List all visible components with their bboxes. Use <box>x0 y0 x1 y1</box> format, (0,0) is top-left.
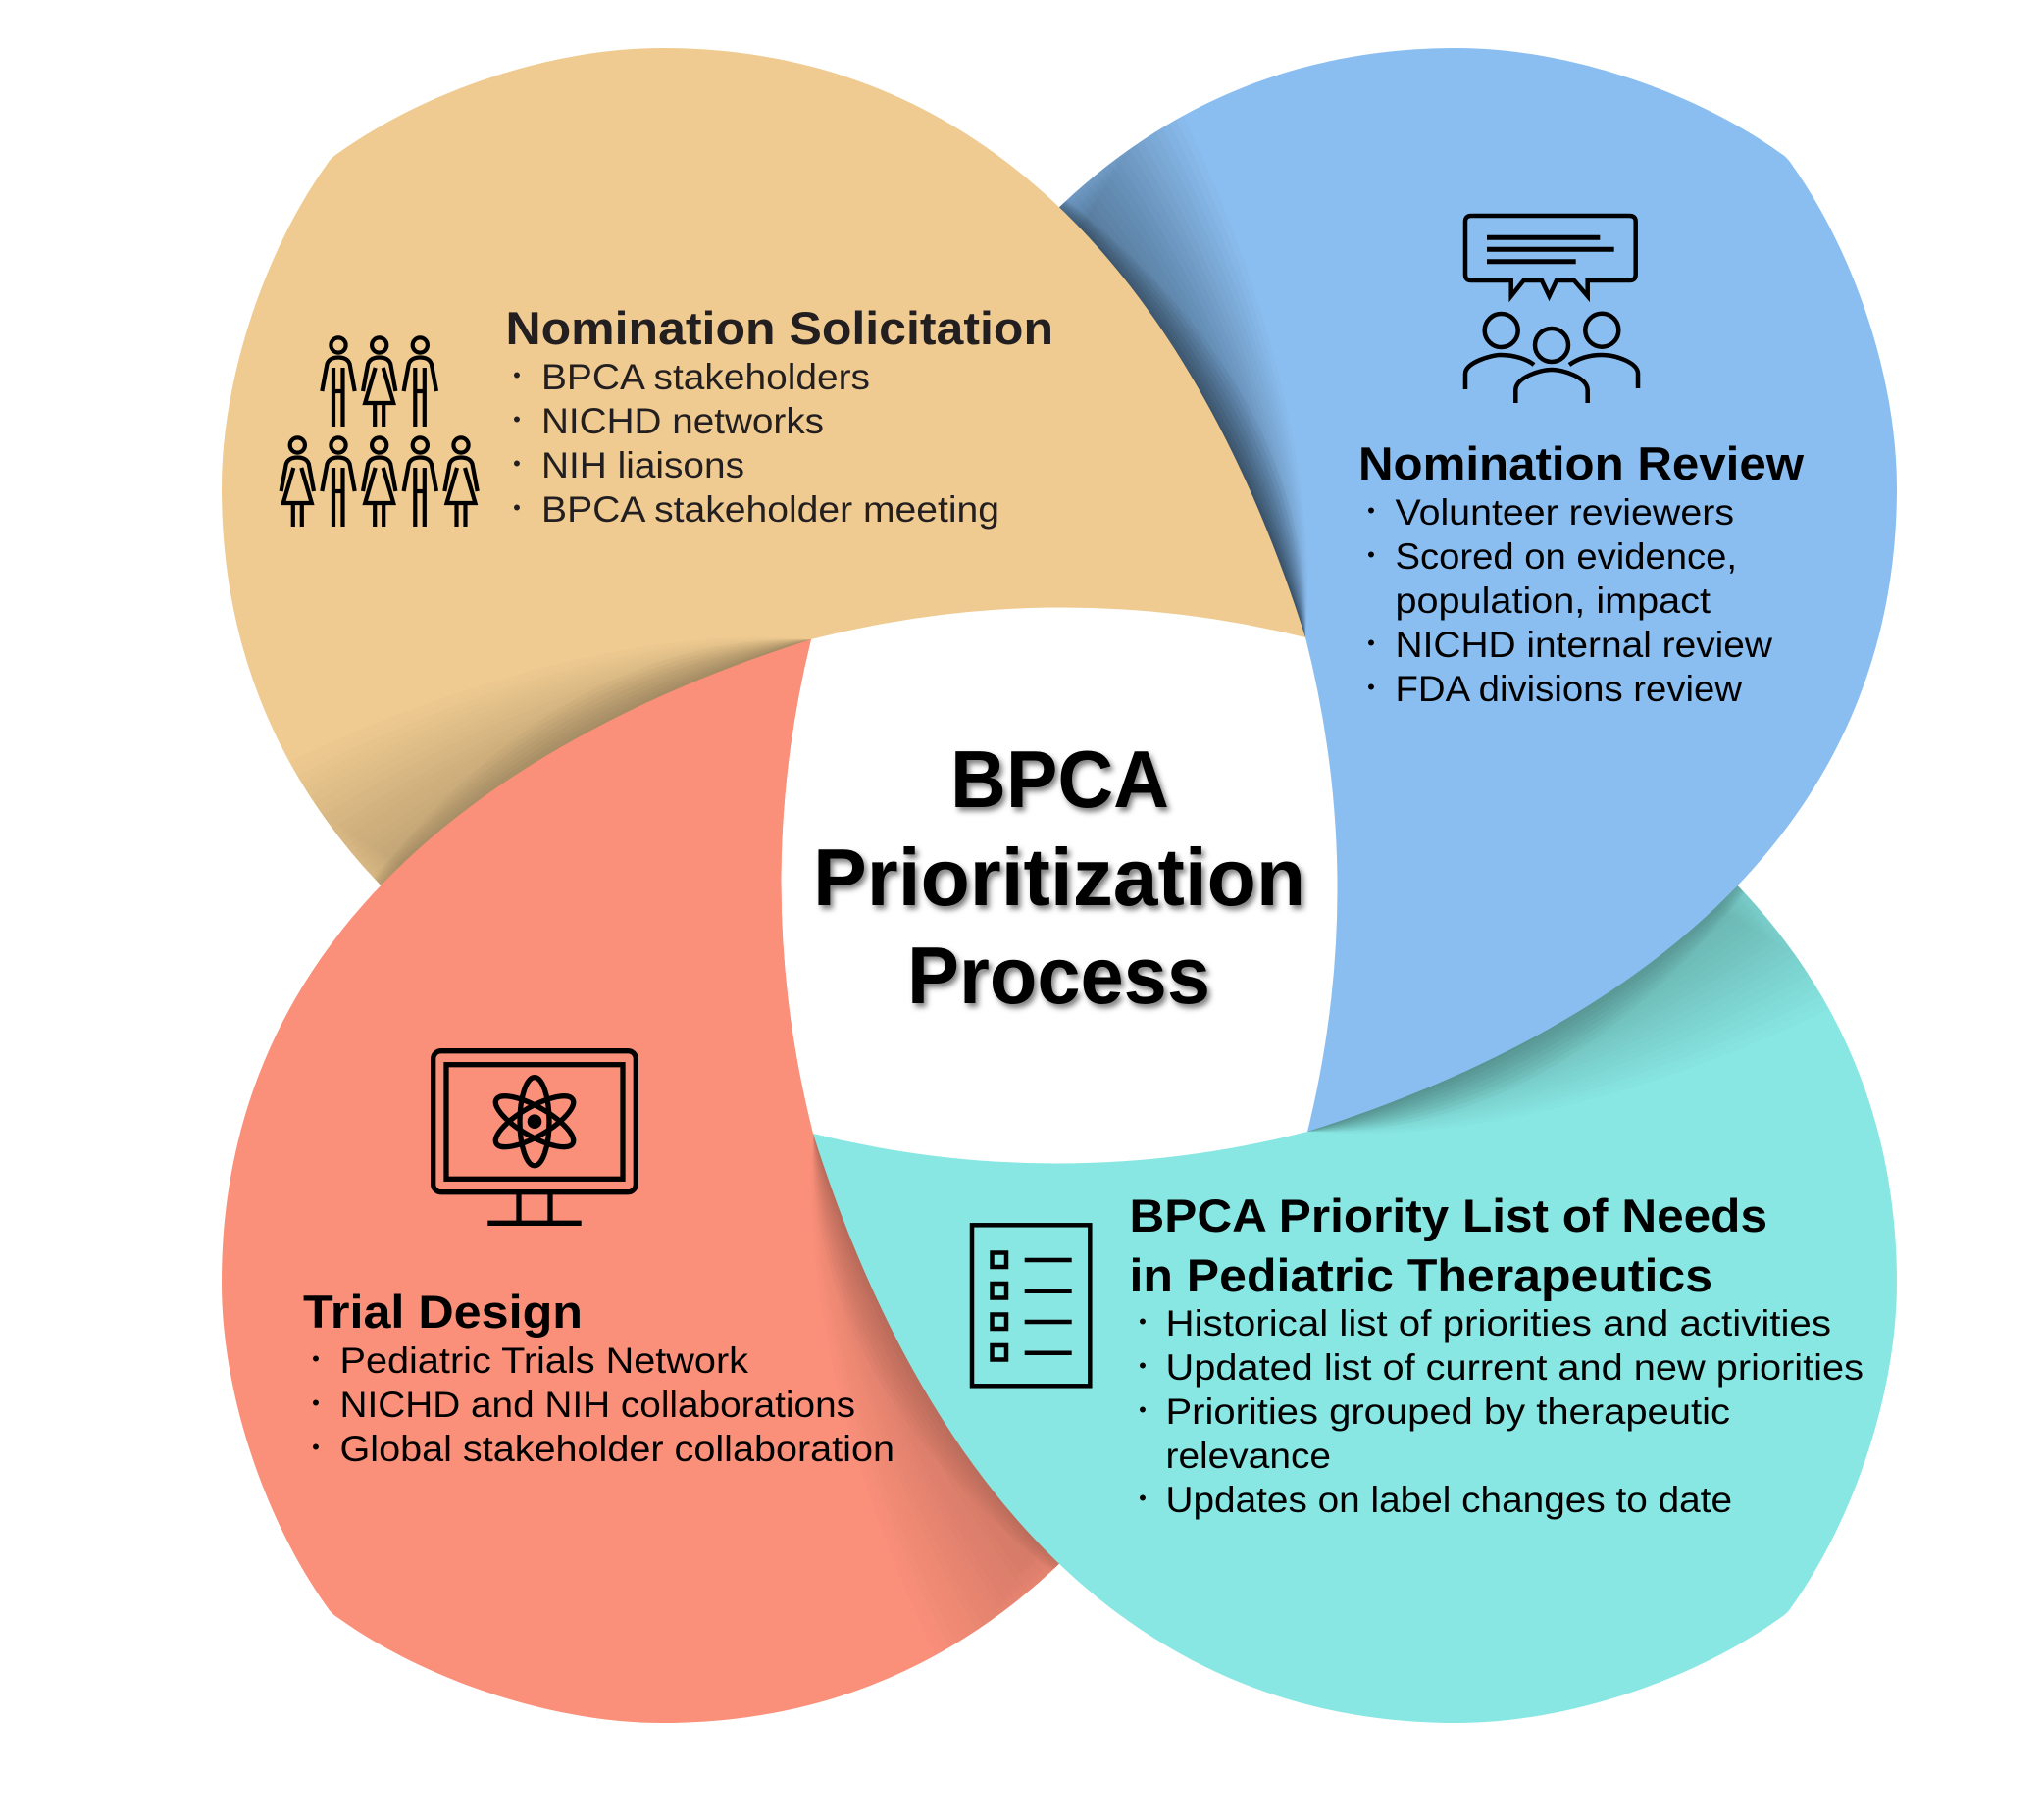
bullet list: • <box>513 495 521 520</box>
bullet list: population, impact <box>1395 581 1711 621</box>
panel: Nomination Solicitation petal <box>222 48 1305 1132</box>
bullet list <box>513 357 999 530</box>
bullet list <box>1367 492 1772 709</box>
speech bubble <box>1465 216 1636 296</box>
reviewers <box>1465 314 1638 403</box>
text block: Nomination Solicitation <box>506 302 1053 530</box>
atom <box>489 1078 580 1166</box>
speech bubble text lines <box>1487 237 1614 262</box>
bullet list: • <box>312 1346 320 1371</box>
bullet list: Volunteer reviewers <box>1395 492 1734 532</box>
icon: speech bubble above three people <box>1465 216 1638 403</box>
panel: Trial Design petal overlap on top of Nomination Solicitation <box>239 639 812 1134</box>
bullet list: FDA divisions review <box>1395 669 1742 709</box>
checkboxes <box>993 1253 1006 1359</box>
heading: BPCA Priority List of Needs in Pediatric Therapeutics <box>1130 1189 1767 1301</box>
bullet list: Updated list of current and new priorities <box>1165 1347 1864 1388</box>
bullet list: • <box>513 407 521 431</box>
bullet list: • <box>1139 1486 1147 1510</box>
heading: BPCA Priority List of Needs in Pediatric Therapeutics: in Pediatric Therapeutics <box>1130 1249 1712 1301</box>
bullet list: • <box>1139 1309 1147 1334</box>
icon: checklist <box>972 1225 1090 1386</box>
bullet list: Scored on evidence, <box>1395 536 1737 577</box>
panel: Trial Design petal <box>222 639 1305 1723</box>
text block: BPCA Priority List of Needs <box>1130 1189 1864 1520</box>
heading: Nomination Review: Nomination Review <box>1358 437 1804 489</box>
bullet list: Global stakeholder collaboration <box>339 1429 894 1469</box>
checklist page <box>972 1225 1090 1386</box>
icon: group of people <box>281 337 478 527</box>
bullet list: Historical list of priorities and activities <box>1165 1303 1831 1343</box>
bullet list: NIH liaisons <box>541 445 744 485</box>
icon: monitor with atom <box>434 1051 636 1223</box>
checklist lines <box>1025 1260 1072 1353</box>
bullet list: • <box>312 1435 320 1459</box>
bullet list: Priorities grouped by therapeutic <box>1165 1391 1730 1432</box>
bullet list: • <box>513 451 521 476</box>
monitor screen <box>446 1065 623 1179</box>
heading: BPCA Priority List of Needs in Pediatric Therapeutics: BPCA Priority List of Needs <box>1130 1189 1767 1241</box>
title: BPCA <box>950 733 1169 825</box>
bullet list: NICHD networks <box>541 401 824 441</box>
bullet list: • <box>1139 1397 1147 1422</box>
bullet list: • <box>1367 631 1375 655</box>
bullet list: • <box>513 363 521 387</box>
bullet list: • <box>1139 1353 1147 1378</box>
bullet list: • <box>1367 675 1375 699</box>
title: Process <box>907 930 1210 1021</box>
heading: Nomination Solicitation: Nomination Solicitation <box>506 302 1053 354</box>
bullet list: • <box>312 1390 320 1415</box>
bullet list: Pediatric Trials Network <box>339 1340 749 1381</box>
bullet list: NICHD and NIH collaborations <box>339 1385 855 1425</box>
bullet list: relevance <box>1165 1436 1331 1476</box>
bullet list: NICHD internal review <box>1395 625 1772 665</box>
title: Prioritization <box>813 832 1305 923</box>
bullet list <box>312 1340 894 1469</box>
text block: Nomination Review <box>1358 437 1804 709</box>
panel: Priority List petal <box>813 639 1897 1723</box>
text block: Trial Design <box>303 1286 894 1469</box>
bullet list: • <box>1367 498 1375 523</box>
bullet list: BPCA stakeholder meeting <box>541 489 999 530</box>
monitor stand <box>487 1192 582 1223</box>
panel: Nomination Review petal <box>813 48 1897 1132</box>
monitor frame <box>434 1051 636 1192</box>
bullet list <box>1139 1303 1864 1520</box>
heading: Trial Design: Trial Design <box>303 1286 583 1338</box>
bullet list: BPCA stakeholders <box>541 357 870 397</box>
title <box>813 733 1305 1021</box>
bullet list: Updates on label changes to date <box>1165 1480 1732 1520</box>
bullet list: • <box>1367 542 1375 567</box>
